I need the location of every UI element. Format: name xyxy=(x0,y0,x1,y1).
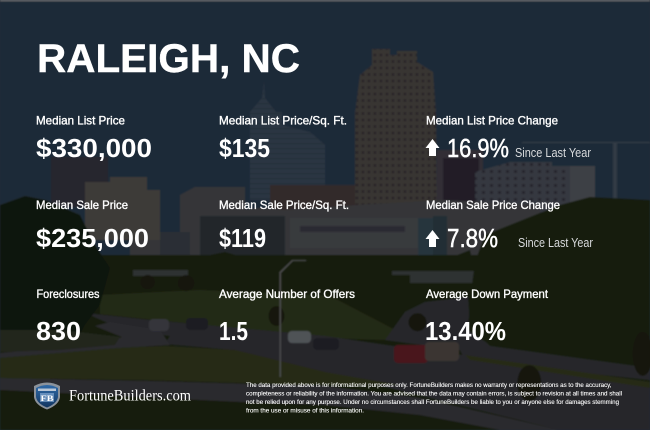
lawn slope xyxy=(100,290,395,340)
cars xyxy=(149,319,169,331)
road: upward road xyxy=(385,297,650,380)
overpass xyxy=(133,270,512,283)
stat: average number of offers xyxy=(219,287,355,346)
building: hotel xyxy=(475,162,595,215)
stat: median list price: Median List Price xyxy=(36,114,125,128)
stat: foreclosures xyxy=(36,287,100,346)
small trees xyxy=(141,275,650,401)
logo: FortuneBuilders xyxy=(34,382,191,410)
tree line middle xyxy=(90,250,480,322)
disclaimer text: completeness or reliability of the information. You are advised that the data may contain errors, is subject to revision at all times and shall xyxy=(246,392,622,398)
building: lower wide glass building xyxy=(130,200,540,262)
stat: median sale price: $235,000 xyxy=(36,223,149,253)
lamp post xyxy=(280,260,306,377)
disclaimer text: not be relied upon for any purpose. Under no circumstances shall FortuneBuilders be liable to you or anyone else for damages stemming xyxy=(246,400,619,406)
stat: median list price per sq ft: $135 xyxy=(219,133,270,163)
stat: median sale price per sq ft: $119 xyxy=(219,223,266,253)
stat: median list price change: Since Last Year xyxy=(515,145,592,160)
stat: median sale price xyxy=(36,198,149,253)
icon: up arrow xyxy=(426,230,440,247)
building: tan block xyxy=(85,177,160,240)
stat: median list price change xyxy=(426,114,592,163)
stat: foreclosures: Foreclosures xyxy=(36,287,100,301)
stat: foreclosures: 830 xyxy=(36,316,81,346)
stat: median list price change: Median List Price Change xyxy=(426,114,558,128)
stat: average down payment xyxy=(425,287,549,346)
stat: median list price change: 16.9% xyxy=(447,133,509,163)
road: lower left band xyxy=(0,378,560,430)
stat: average number of offers: 1.5 xyxy=(219,316,248,346)
stat: median sale price change xyxy=(426,198,594,253)
lower lawn xyxy=(0,346,400,385)
road: main carriageway xyxy=(85,313,650,430)
trees: right mass xyxy=(468,197,650,366)
icon: up arrow xyxy=(426,139,440,156)
crane xyxy=(522,142,650,205)
building: glass tower xyxy=(250,82,325,200)
disclaimer text xyxy=(246,383,622,414)
disclaimer text: from the use or misuse of this information. xyxy=(246,408,364,414)
disclaimer text: The data provided above is for informational purposes only. FortuneBuilders makes no warranty or representations as to the accuracy, xyxy=(246,383,612,389)
stat: median list price per sq ft: Median List Price/Sq. Ft. xyxy=(219,114,347,128)
bottom lawn xyxy=(0,390,500,430)
stat: median list price per sq ft xyxy=(219,114,347,163)
stat: average number of offers: Average Number of Offers xyxy=(219,287,355,301)
stat: median sale price change: Since Last Year xyxy=(518,235,594,250)
stat: average down payment: 13.40% xyxy=(425,316,506,346)
trees: left mass xyxy=(0,196,110,335)
building: main tower xyxy=(355,49,437,210)
icon: shield xyxy=(34,382,60,410)
stat: median sale price change: Median Sale Price Change xyxy=(426,198,560,212)
road: off-ramp xyxy=(0,322,170,358)
stat: median sale price: Median Sale Price xyxy=(36,198,128,212)
icon: shield: FB xyxy=(40,393,54,403)
stat: median sale price change: 7.8% xyxy=(447,223,498,253)
stat: median sale price per sq ft: Median Sale Price/Sq. Ft. xyxy=(219,198,349,212)
stat: median list price: $330,000 xyxy=(36,133,152,163)
wordmark: FortuneBuilders.com xyxy=(69,388,191,404)
ground base xyxy=(0,255,650,430)
stat: median list price xyxy=(36,114,152,163)
building: centre-left block xyxy=(180,187,245,245)
strip of grass xyxy=(465,355,650,388)
stat: median sale price per sq ft xyxy=(219,198,349,253)
stat: average down payment: Average Down Payment xyxy=(426,287,549,301)
building: left dark tower xyxy=(51,157,108,207)
building: mid striped xyxy=(437,150,483,220)
title: RALEIGH, NC xyxy=(37,37,300,81)
